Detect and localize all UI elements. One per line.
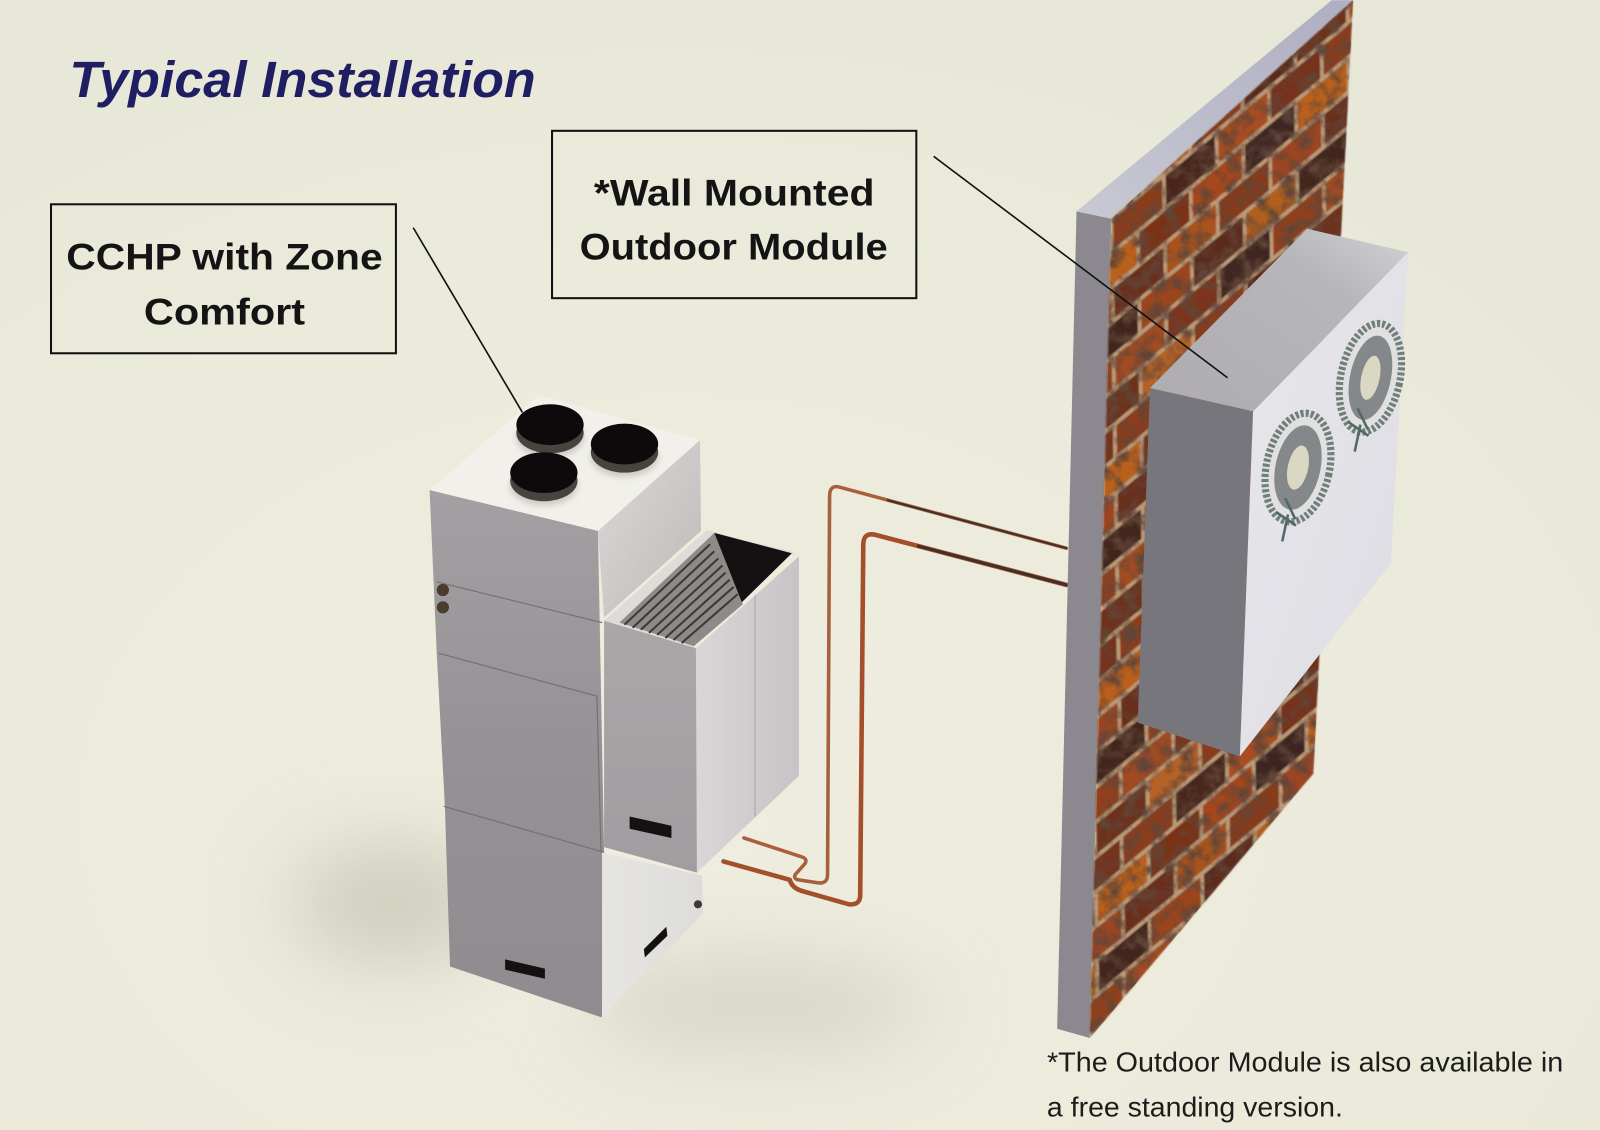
slot: module <box>630 817 671 838</box>
leader line: CCHP <box>413 228 522 412</box>
fan: lower <box>1248 402 1344 549</box>
side module front face <box>604 621 697 873</box>
wall side face <box>1057 211 1111 1038</box>
callout: CCHP with Zone Comfort: Comfort <box>144 292 305 333</box>
fan: upper <box>1323 313 1415 458</box>
unit upper right face <box>598 440 701 618</box>
unit top face <box>430 395 700 531</box>
side module rim <box>604 530 799 648</box>
callout: CCHP with Zone Comfort: CCHP with Zone <box>66 237 383 278</box>
title: Typical Installation <box>69 51 536 108</box>
callout: wall mounted outdoor module: *Wall Mounted <box>594 172 874 213</box>
dark intake <box>714 533 792 602</box>
CCHP indoor unit <box>430 395 799 1018</box>
unit left face <box>430 490 604 1018</box>
module side face <box>1138 388 1253 756</box>
duct: right <box>591 424 658 477</box>
side module seam <box>754 595 756 817</box>
callout: CCHP with Zone Comfort <box>51 204 396 353</box>
side knobs <box>437 584 449 613</box>
outdoor module <box>1138 229 1415 756</box>
module top face <box>1150 229 1408 411</box>
floor shadows <box>291 842 929 1051</box>
callout: wall mounted outdoor module <box>552 131 916 298</box>
leader line: outdoor module <box>934 156 1228 378</box>
module front face <box>1240 252 1408 756</box>
brick face <box>1090 0 1353 1038</box>
wall top face <box>1077 0 1353 219</box>
duct: front <box>510 452 578 505</box>
unit lower right face <box>602 852 703 1018</box>
footnote <box>1047 1047 1563 1123</box>
footnote: *The Outdoor Module is also available in <box>1047 1047 1563 1078</box>
slot: base front <box>505 959 545 979</box>
grille <box>619 533 743 646</box>
fitting <box>694 900 702 908</box>
slot: base side <box>644 927 667 957</box>
side module right face <box>696 556 799 873</box>
copper pipes <box>723 487 1066 904</box>
panel seams <box>437 582 604 852</box>
duct: rear left <box>516 404 584 457</box>
callout: wall mounted outdoor module: Outdoor Module <box>580 226 888 267</box>
footnote: a free standing version. <box>1047 1092 1343 1123</box>
wall <box>1057 0 1353 1038</box>
brick weathering <box>1090 0 1353 1038</box>
